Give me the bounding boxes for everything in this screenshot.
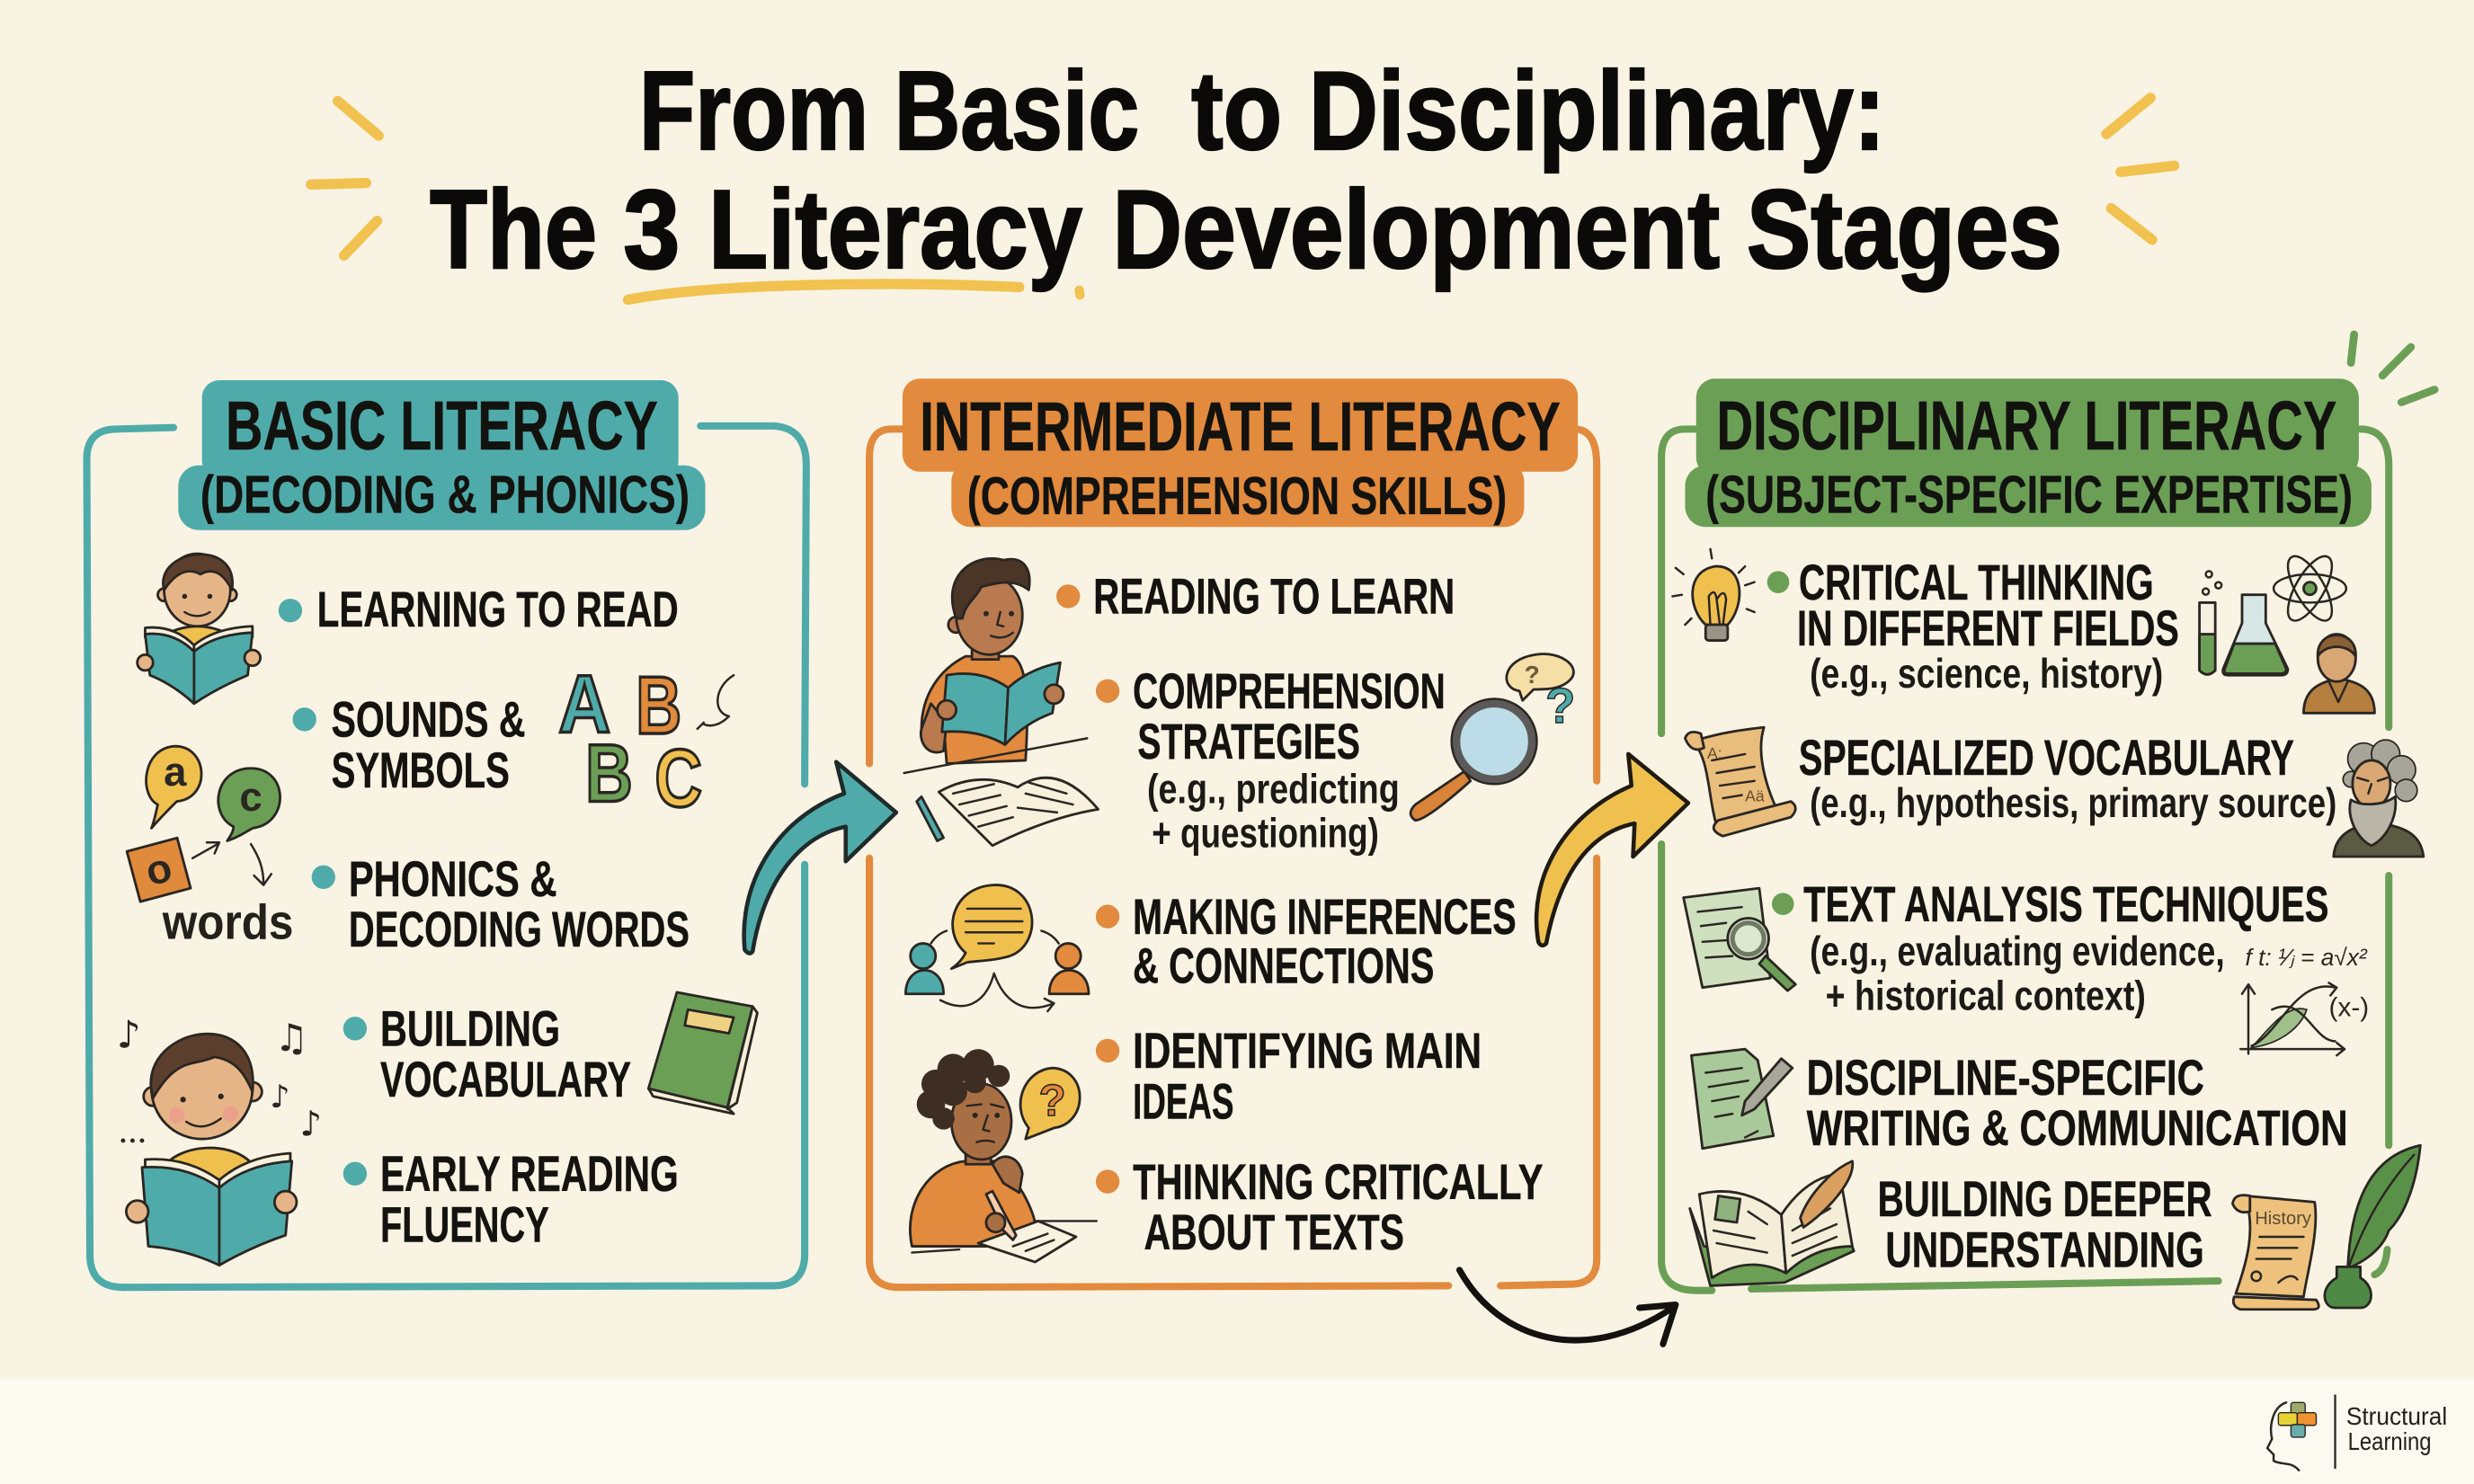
arrow: basic to intermediate bbox=[744, 762, 896, 954]
bullets and text: PHONICS & bbox=[349, 851, 557, 907]
icon: phonics bubbles: o bbox=[140, 844, 176, 894]
title: Stages bbox=[1747, 168, 2062, 292]
text: words: words bbox=[162, 894, 293, 949]
title: From Basic bbox=[639, 49, 1139, 173]
icon: boy with book and music: ♪ bbox=[270, 1079, 290, 1115]
bullets and text: LEARNING TO READ bbox=[317, 582, 679, 637]
title: The bbox=[430, 168, 597, 292]
bullets and text: DISCIPLINE-SPECIFIC bbox=[1807, 1050, 2204, 1106]
icon: writing document with pen bbox=[1691, 1049, 1793, 1149]
icon: scroll with annotations bbox=[1685, 727, 1795, 836]
icon: discussion between two people bbox=[905, 885, 1089, 1011]
bullets and text: + questioning) bbox=[1152, 809, 1379, 856]
icon: alphabet letters: B bbox=[636, 660, 681, 751]
icon: document under magnifier bbox=[1684, 888, 1795, 991]
icon: alphabet letters: C bbox=[654, 733, 702, 824]
bullets and text: BUILDING bbox=[380, 1001, 560, 1057]
icon: scholar portrait bbox=[2334, 740, 2424, 857]
bullets and text: (e.g., hypothesis, primary source) bbox=[1810, 779, 2336, 826]
icon: magnifying glass with questions: ? bbox=[1525, 661, 1540, 689]
bullets and text: IDENTIFYING MAIN bbox=[1133, 1023, 1482, 1079]
title underline bbox=[628, 284, 1080, 299]
logo: Structural Learning: Learning bbox=[2348, 1427, 2432, 1455]
title: to Disciplinary: bbox=[1191, 49, 1885, 173]
arrow: black curve to disciplinary bbox=[1459, 1270, 1676, 1344]
title: Development bbox=[1112, 168, 1720, 292]
bullets and text: ABOUT TEXTS bbox=[1144, 1204, 1404, 1260]
bullets and text: (e.g., predicting bbox=[1147, 765, 1400, 812]
header: disciplinary literacy bbox=[1685, 378, 2372, 527]
bullets and text: READING TO LEARN bbox=[1093, 569, 1455, 625]
logo: Structural Learning bbox=[2267, 1395, 2447, 1471]
icon: history scroll: History bbox=[2255, 1209, 2312, 1229]
icon: quill and inkwell bbox=[2325, 1145, 2420, 1308]
bullets and text: THINKING CRITICALLY bbox=[1133, 1154, 1543, 1210]
title sparkles right bbox=[2106, 98, 2175, 240]
icon: light bulb bbox=[1672, 549, 1755, 641]
panel: disciplinary literacy bbox=[1661, 334, 2434, 1310]
icon: historian portrait bbox=[2303, 635, 2374, 713]
icon: alphabet letters: B bbox=[585, 728, 633, 820]
bullets and text: CRITICAL THINKING bbox=[1799, 555, 2154, 610]
icon: alphabet letters bbox=[558, 658, 734, 824]
icon: scroll with annotations: A: bbox=[1707, 744, 1722, 762]
icon: boy with book and music: ♪ bbox=[117, 1012, 141, 1056]
bullets and text bbox=[1056, 569, 1543, 1260]
icon: scroll with annotations: Aä bbox=[1745, 787, 1765, 805]
icon: boy with book and music: ♪ bbox=[299, 1105, 322, 1145]
bullets and text: VOCABULARY bbox=[380, 1052, 631, 1107]
title: 3 bbox=[623, 168, 680, 292]
header: intermediate literacy bbox=[903, 378, 1578, 527]
icon: formula and graph: f t: ¹⁄ⱼ = a√x² bbox=[2246, 944, 2368, 971]
title sparkles left bbox=[311, 101, 378, 255]
header: intermediate literacy: INTERMEDIATE LITERACY bbox=[920, 388, 1561, 466]
icon: boy reading bbox=[138, 554, 261, 704]
bullets and text: FLUENCY bbox=[380, 1196, 549, 1252]
icon: phonics bubbles: c bbox=[239, 774, 263, 820]
logo: Structural Learning: Structural bbox=[2346, 1402, 2447, 1430]
bullets and text: + historical context) bbox=[1826, 972, 2146, 1018]
icon: boy with book and music: ♫ bbox=[274, 1016, 308, 1060]
icon: formula and graph: (x-) bbox=[2329, 992, 2369, 1022]
icon: child thinking bbox=[910, 1049, 1097, 1262]
icon: boy with book and music bbox=[117, 1012, 322, 1266]
title: Literacy bbox=[708, 168, 1082, 292]
bullets and text bbox=[279, 582, 690, 1252]
panel: basic literacy bbox=[87, 380, 806, 1287]
header: basic literacy bbox=[178, 380, 706, 530]
title bbox=[430, 49, 2062, 292]
bullets and text: DECODING WORDS bbox=[349, 902, 690, 957]
burst marks bbox=[2351, 334, 2434, 403]
icon: magnifying glass with questions bbox=[1411, 654, 1575, 821]
bullets and text: STRATEGIES bbox=[1137, 714, 1360, 769]
bullets and text: COMPREHENSION bbox=[1133, 663, 1446, 719]
icon: green book bbox=[648, 992, 757, 1114]
icon: phonics bubbles bbox=[127, 746, 280, 902]
icon: magnifying glass with questions: ? bbox=[1545, 679, 1575, 733]
header: intermediate literacy: (COMPREHENSION SKILLS) bbox=[967, 466, 1507, 526]
bullets and text: SOUNDS & bbox=[332, 692, 525, 748]
bullets and text: SYMBOLS bbox=[332, 742, 510, 798]
icon: child thinking: ? bbox=[1039, 1077, 1066, 1125]
bullets and text: IN DIFFERENT FIELDS bbox=[1797, 600, 2179, 656]
icon: formula and graph bbox=[2240, 944, 2369, 1055]
arrow: intermediate to disciplinary bbox=[1536, 754, 1688, 946]
icon: science glassware and atom bbox=[2200, 550, 2346, 675]
bullets and text: & CONNECTIONS bbox=[1133, 937, 1434, 993]
bullets and text: (e.g., science, history) bbox=[1810, 650, 2163, 697]
bullets and text: BUILDING DEEPER bbox=[1878, 1171, 2212, 1227]
icon: student reading at desk bbox=[904, 558, 1099, 846]
icon: history scroll bbox=[2232, 1195, 2318, 1310]
bullets and text bbox=[1767, 555, 2348, 1277]
bullets and text: EARLY READING bbox=[380, 1146, 679, 1202]
icon: open book with quill bbox=[1690, 1161, 1854, 1285]
icon: phonics bubbles: a bbox=[164, 749, 187, 795]
bullets and text: MAKING INFERENCES bbox=[1133, 889, 1517, 945]
header: basic literacy: (DECODING & PHONICS) bbox=[200, 464, 690, 524]
bullets and text: IDEAS bbox=[1133, 1073, 1233, 1129]
bullets and text: UNDERSTANDING bbox=[1885, 1222, 2204, 1277]
icon: alphabet letters: A bbox=[558, 658, 610, 750]
header: basic literacy: BASIC LITERACY bbox=[226, 387, 658, 465]
panel: intermediate literacy bbox=[869, 378, 1597, 1287]
bullets and text: SPECIALIZED VOCABULARY bbox=[1799, 730, 2294, 786]
bullets and text: (e.g., evaluating evidence, bbox=[1810, 928, 2225, 974]
